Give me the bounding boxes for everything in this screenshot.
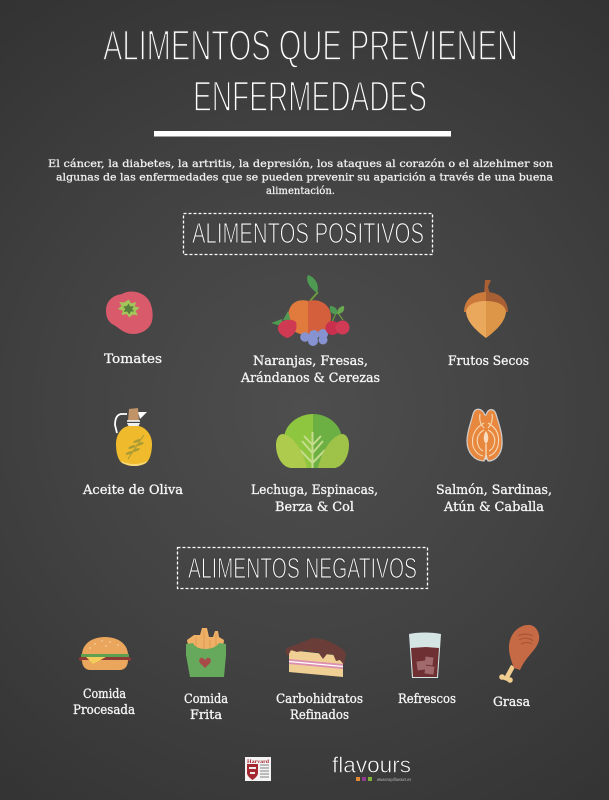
label: salmon: Atún & Caballa [443,500,544,515]
label: lechuga: Lechuga, Espinacas, [251,483,378,498]
title rule [154,131,451,136]
label: naranjas: Naranjas, Fresas, [253,354,368,369]
title [103,22,518,121]
icon: burger [79,637,131,670]
label: comida procesada [73,687,135,718]
label: naranjas [240,354,380,386]
label: carbohidratos: Carbohidratos [276,692,363,707]
label: comida procesada: Procesada [73,703,135,718]
logo: harvard [245,757,271,781]
label: frutos secos: Frutos Secos [448,354,529,369]
label: refrescos: Refrescos [398,692,456,707]
heading: alimentos positivos: ALIMENTOS POSITIVOS [192,218,424,250]
logo: flavours: www.mayoflavours.es [377,777,412,782]
intro text: algunas de las enfermedades que se pueden prevenir su aparición a través de una buena [56,172,553,184]
label: tomates: Tomates [104,352,162,367]
icon: cake [286,638,346,677]
icon: olive oil [115,408,152,466]
label: grasa: Grasa [493,695,530,710]
icon: salmon [467,409,502,461]
icon: fries [186,628,226,677]
intro text: alimentación. [266,185,335,197]
intro text [48,158,553,197]
label: naranjas: Arándanos & Cerezas [240,371,380,386]
label: comida frita [184,692,228,723]
label: comida frita: Comida [184,692,228,707]
heading: alimentos positivos [184,214,432,254]
label: lechuga: Berza & Col [275,500,354,515]
label: salmon [436,483,552,515]
label: comida procesada: Comida [83,687,126,702]
logo: flavours: flavours [332,752,411,778]
logo: harvard: Harvard [247,759,269,765]
label: lechuga [251,483,378,515]
icon: drumstick [499,625,539,683]
icon: lettuce [276,414,349,468]
label: salmon: Salmón, Sardinas, [436,483,552,498]
heading: alimentos negativos [178,548,428,588]
icon: acorn [464,280,508,338]
heading: alimentos negativos: ALIMENTOS NEGATIVOS [188,553,417,585]
label: comida frita: Frita [190,708,222,723]
label: aceite de oliva: Aceite de Oliva [82,483,183,498]
icon: soda glass [409,632,441,678]
icon: fruits [271,275,350,346]
label: carbohidratos: Refinados [290,708,349,723]
intro text: El cáncer, la diabetes, la artritis, la depresión, los ataques al corazón o el alzehimer son [48,158,553,170]
icon: tomato [106,291,153,334]
label: carbohidratos [276,692,363,723]
title: ENFERMEDADES [193,73,427,121]
